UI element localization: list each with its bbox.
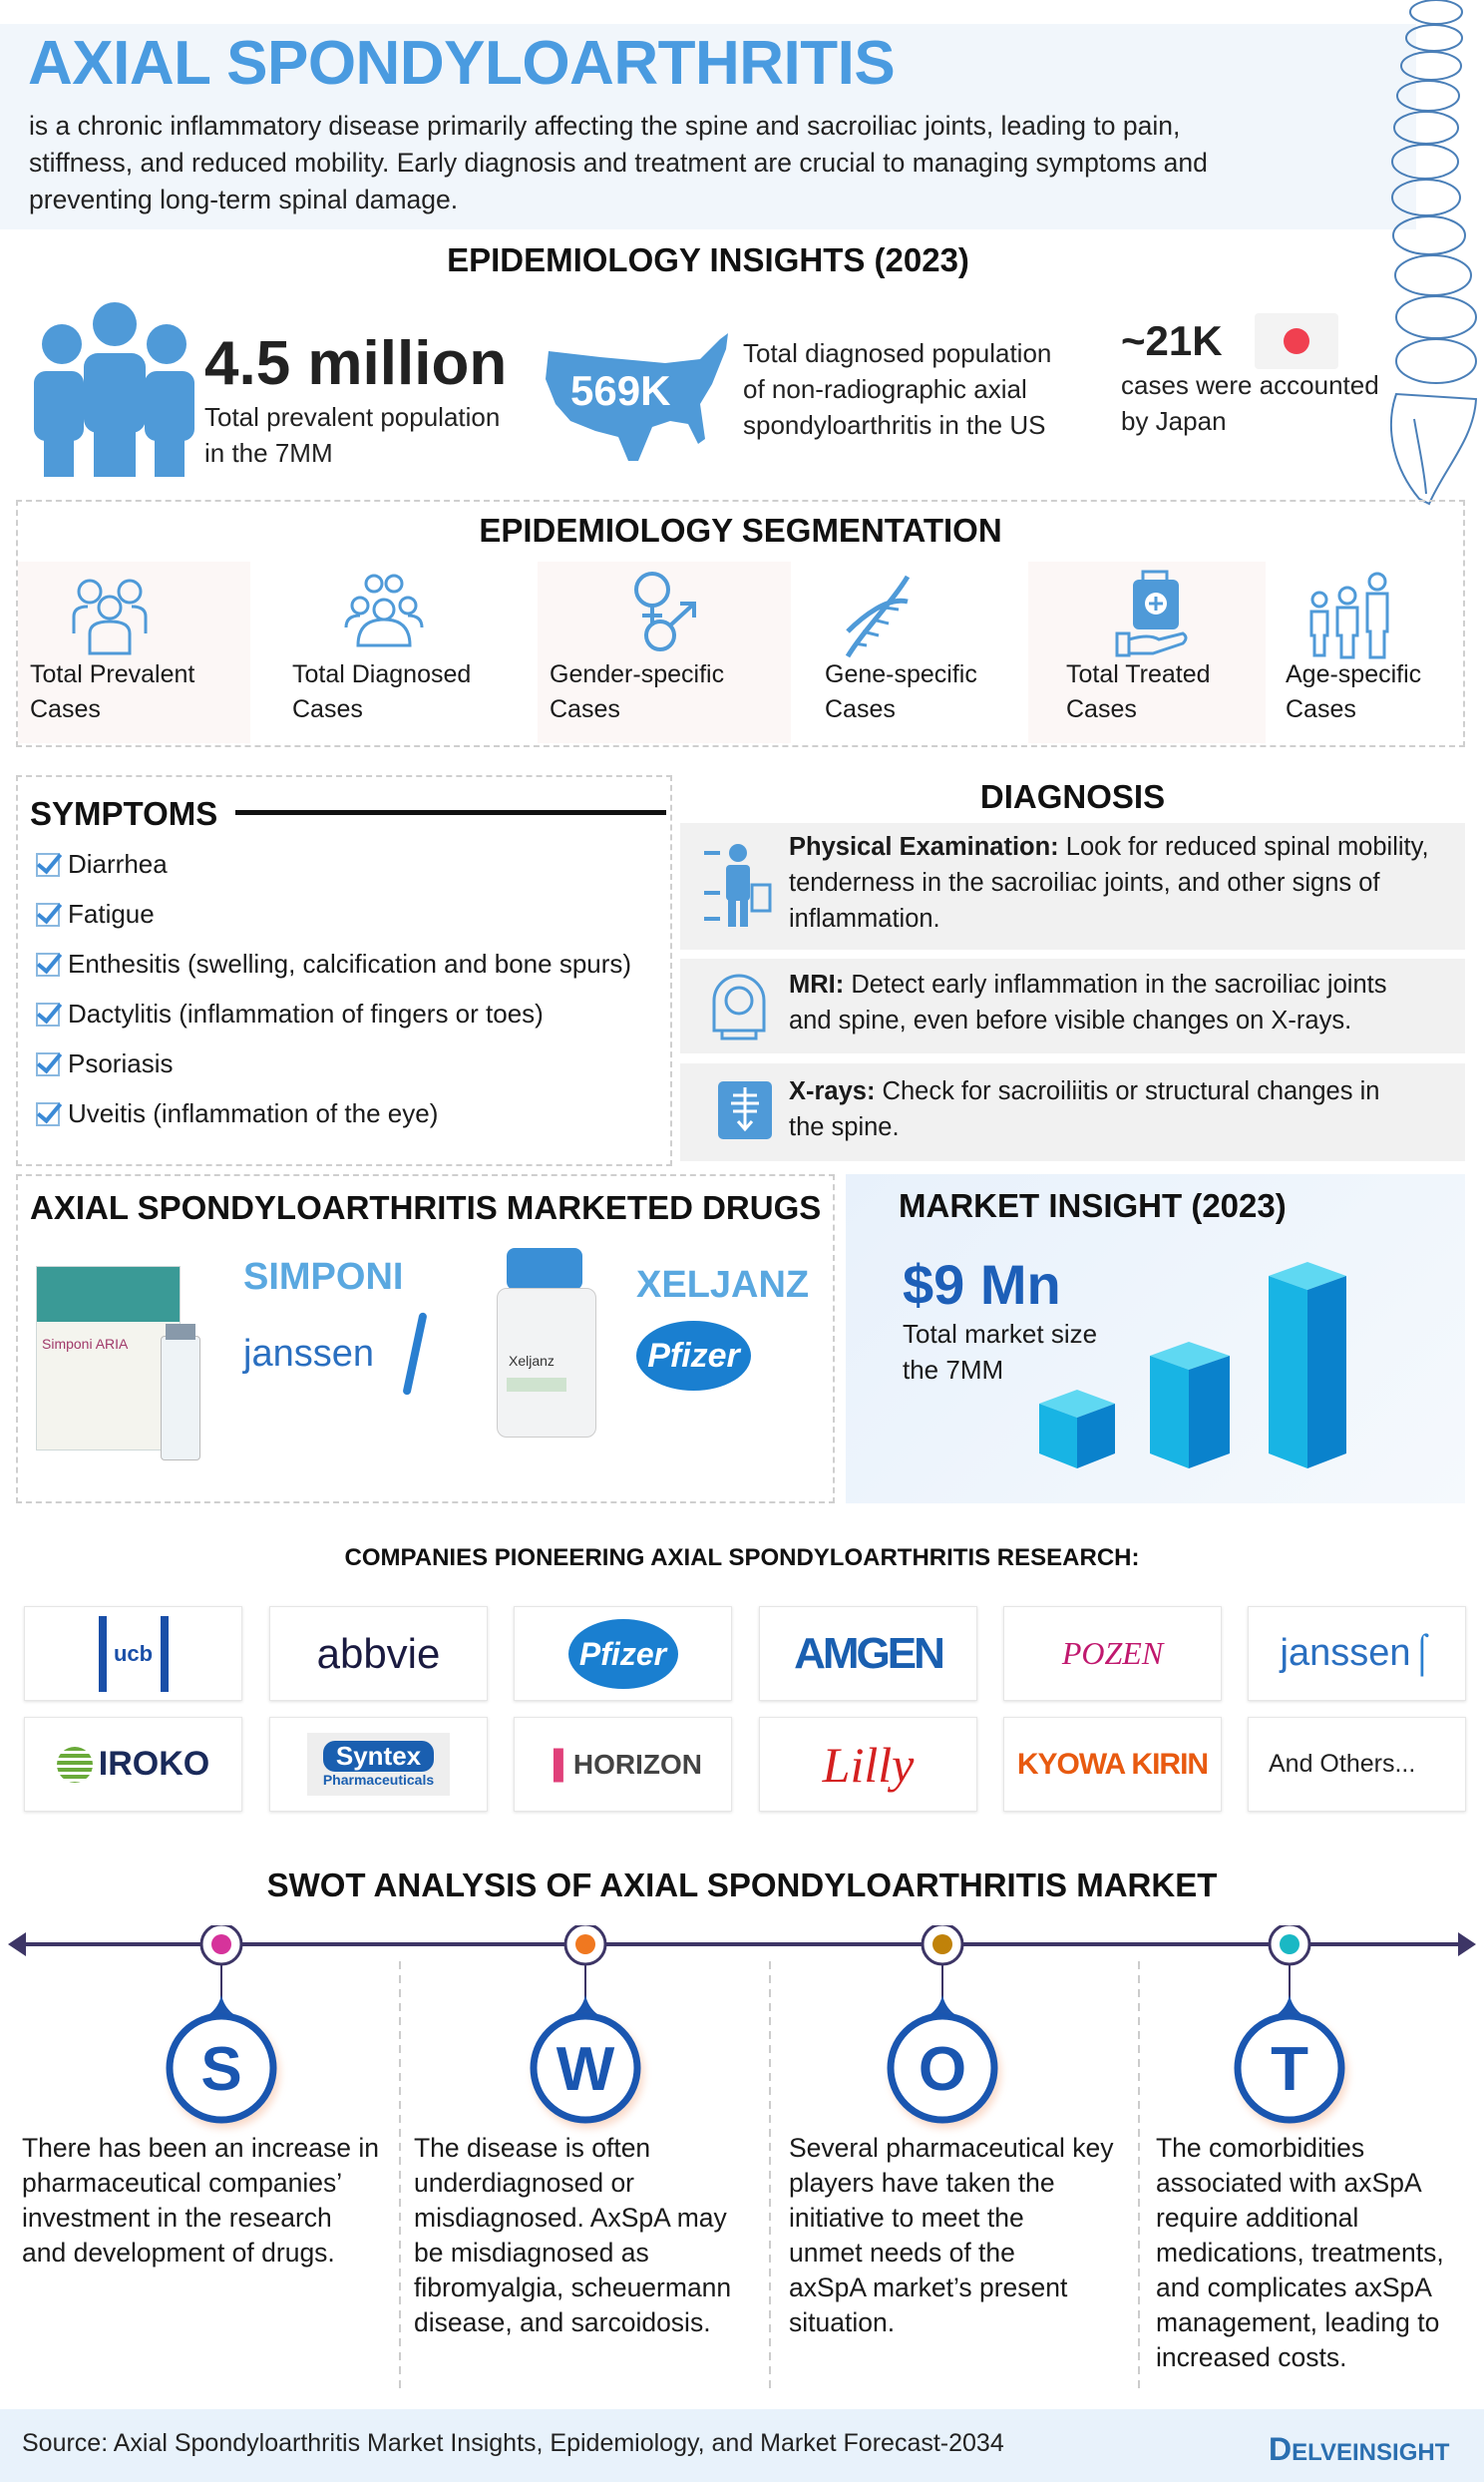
timeline with SWOT pins: O — [919, 2035, 966, 2104]
SWOT text: weaknesses: fibromyalgia, scheuermann — [414, 2273, 731, 2302]
stat: 4.5 million: in the 7MM — [204, 438, 333, 468]
heading: AXIAL SPONDYLOARTHRITIS MARKETED DRUGS — [30, 1189, 821, 1226]
SWOT text: threats: and complicates axSpA — [1156, 2273, 1432, 2302]
diagnosis: MRI — [680, 959, 1465, 1053]
title: AXIAL SPONDYLOARTHRITIS — [28, 29, 895, 98]
symptom list — [36, 849, 631, 1128]
stat: Japan: cases were accounted — [1121, 370, 1379, 400]
drug: simponi package: Simponi ARIA — [42, 1336, 128, 1352]
logo: DelveInsight: DELVEINSIGHT — [1269, 2431, 1449, 2467]
stat: Japan — [1121, 313, 1379, 436]
stat: 4.5 million: Total prevalent population — [204, 402, 500, 432]
SWOT text: weaknesses: The disease is often — [414, 2133, 650, 2163]
SWOT text: threats: management, leading to — [1156, 2307, 1439, 2337]
SWOT text: opportunities: axSpA market’s present — [789, 2273, 1067, 2302]
panel: market insight: the 7MM — [903, 1355, 1003, 1385]
heading: MARKET INSIGHT (2023) — [899, 1187, 1287, 1224]
SWOT text: threats — [1156, 2133, 1444, 2372]
logo grid: AMGEN — [794, 1628, 942, 1678]
stat: 4.5 million: 4.5 million — [204, 329, 507, 398]
symptom list: Diarrhea — [68, 849, 168, 879]
description: preventing long-term spinal damage. — [29, 185, 458, 214]
diagnosis: MRI: MRI: Detect early inflammation in the sacroiliac joints — [789, 971, 1386, 999]
segment: gender-specific: Gender-specific — [550, 660, 724, 688]
panel: market insight — [846, 1174, 1465, 1503]
drug: simponi package — [36, 1266, 200, 1460]
symptom list: Fatigue — [68, 899, 155, 929]
symptom list: Uveitis (inflammation of the eye) — [68, 1098, 438, 1128]
logo grid: ⌠ — [1411, 1632, 1433, 1674]
stat: 4.5 million — [204, 329, 507, 468]
diagnosis: X-rays: X-rays: Check for sacroiliitis or structural changes in — [789, 1077, 1379, 1105]
logo grid: Syntex — [336, 1741, 421, 1771]
stat text: US: of non-radiographic axial — [743, 374, 1027, 404]
drug name: xeljanz / pfizer: Pfizer — [647, 1337, 740, 1375]
logo grid: IROKO — [99, 1745, 209, 1783]
SWOT text: opportunities: Several pharmaceutical key — [789, 2133, 1114, 2163]
timeline with SWOT pins — [8, 1925, 1476, 2388]
SWOT text: threats: require additional — [1156, 2203, 1358, 2233]
segment: total diagnosed: Total Diagnosed — [292, 660, 471, 688]
stat text: US: spondyloarthritis in the US — [743, 410, 1045, 440]
logo grid: Lilly — [823, 1736, 914, 1792]
symptom list: Dactylitis (inflammation of fingers or toes) — [68, 999, 544, 1029]
panel: epidemiology segmentation — [16, 500, 1465, 747]
drug name: simponi / janssen: janssen — [243, 1333, 374, 1375]
header band — [0, 24, 1416, 229]
stat: Japan: ~21K — [1121, 317, 1223, 364]
segment: gender-specific — [538, 562, 791, 743]
drug: xeljanz bottle: Xeljanz — [509, 1353, 555, 1369]
source text: Source: Axial Spondyloarthritis Market Insights, Epidemiology, and Market Forecast-2034 — [22, 2429, 1004, 2457]
logo grid: ucb — [114, 1640, 153, 1666]
SWOT text: weaknesses: disease, and sarcoidosis. — [414, 2307, 711, 2337]
description — [29, 111, 1208, 214]
segment: total prevalent — [18, 562, 250, 743]
logo grid: ▐ — [544, 1748, 563, 1780]
spine illustration — [1390, 0, 1478, 505]
SWOT text: strengths: pharmaceutical companies’ — [22, 2168, 342, 2198]
segment: total treated: Total Treated — [1066, 660, 1211, 688]
segment: total prevalent: Cases — [30, 695, 101, 723]
heading: companies: COMPANIES PIONEERING AXIAL SPONDYLOARTHRITIS RESEARCH: — [345, 1544, 1139, 1571]
timeline with SWOT pins: W — [556, 2035, 615, 2104]
SWOT text: strengths — [22, 2133, 379, 2268]
SWOT text: weaknesses: misdiagnosed. AxSpA may — [414, 2203, 727, 2233]
logo grid: HORIZON — [573, 1748, 702, 1780]
panel: marketed drugs — [16, 1174, 835, 1503]
segment: gender-specific: Cases — [550, 695, 620, 723]
logo grid: KYOWA KIRIN — [1017, 1748, 1208, 1780]
SWOT text: strengths: investment in the research — [22, 2203, 332, 2233]
segment: age-specific: Age-specific — [1286, 660, 1421, 688]
segment: total treated — [1028, 562, 1266, 743]
segment: total treated: Cases — [1066, 695, 1137, 723]
SWOT text: threats: medications, treatments, — [1156, 2238, 1444, 2268]
panel: symptoms — [16, 775, 672, 1166]
diagnosis: X-rays — [680, 1063, 1465, 1161]
SWOT text: weaknesses — [414, 2133, 731, 2337]
heading: EPIDEMIOLOGY SEGMENTATION — [479, 512, 1002, 549]
SWOT text: threats: The comorbidities — [1156, 2133, 1364, 2163]
SWOT text: weaknesses: underdiagnosed or — [414, 2168, 634, 2198]
SWOT text: strengths: There has been an increase in — [22, 2133, 379, 2163]
segment: total prevalent: Total Prevalent — [30, 660, 194, 688]
logo grid — [23, 1606, 1467, 1814]
description: is a chronic inflammatory disease primarily affecting the spine and sacroiliac joints, leading to pain, — [29, 111, 1180, 141]
SWOT text: opportunities: players have taken the — [789, 2168, 1055, 2198]
diagnosis: MRI: and spine, even before visible changes on X-rays. — [789, 1007, 1351, 1034]
diagnosis: physical examination: Physical Examination: Look for reduced spinal mobility, — [789, 833, 1429, 861]
diagnosis: physical examination: inflammation. — [789, 905, 940, 933]
symptom list: Enthesitis (swelling, calcification and bone spurs) — [68, 949, 631, 979]
segment: gene-specific: Cases — [825, 695, 896, 723]
segment: total diagnosed: Cases — [292, 695, 363, 723]
segment: age-specific — [1286, 573, 1421, 723]
stat: $9 Mn: $9 Mn — [903, 1253, 1061, 1316]
drug name: xeljanz / pfizer — [636, 1264, 809, 1391]
SWOT text: opportunities — [789, 2133, 1114, 2337]
heading: diagnosis: DIAGNOSIS — [980, 778, 1165, 815]
logo grid: POZEN — [1062, 1635, 1163, 1671]
SWOT text: opportunities: initiative to meet the — [789, 2203, 1024, 2233]
diagnosis: physical examination: tenderness in the sacroiliac joints, and other signs of — [789, 869, 1380, 897]
footer — [0, 2409, 1484, 2482]
stat: Japan: by Japan — [1121, 406, 1227, 436]
symptom list: Psoriasis — [68, 1048, 173, 1078]
segment: gene-specific: Gene-specific — [825, 660, 977, 688]
drug name: simponi / janssen: SIMPONI — [243, 1256, 403, 1298]
segment: total diagnosed — [292, 575, 471, 723]
panel: market insight: Total market size — [903, 1319, 1097, 1349]
SWOT text: threats: associated with axSpA — [1156, 2168, 1422, 2198]
heading: epidemiology insights: EPIDEMIOLOGY INSIGHTS (2023) — [447, 241, 969, 278]
drug: xeljanz bottle — [497, 1248, 596, 1438]
segment: age-specific: Cases — [1286, 695, 1356, 723]
SWOT text: strengths: and development of drugs. — [22, 2238, 335, 2268]
logo grid: abbvie — [317, 1630, 440, 1676]
description: stiffness, and reduced mobility. Early diagnosis and treatment are crucial to managing symptoms and — [29, 148, 1208, 178]
icon: people — [34, 302, 194, 477]
drug name: simponi / janssen — [242, 1256, 427, 1395]
heading: symptoms: SYMPTOMS — [30, 795, 217, 832]
segment: gene-specific — [825, 575, 977, 723]
timeline with SWOT pins: T — [1271, 2035, 1308, 2104]
icon: US map with 569K: 569K — [570, 367, 670, 414]
logo grid: Pfizer — [579, 1636, 666, 1672]
logo grid: janssen — [1281, 1632, 1411, 1674]
logo grid: And Others... — [1269, 1750, 1415, 1778]
SWOT text: threats: increased costs. — [1156, 2342, 1346, 2372]
SWOT text: weaknesses: be misdiagnosed as — [414, 2238, 649, 2268]
timeline with SWOT pins: S — [200, 2035, 242, 2104]
SWOT text: opportunities: situation. — [789, 2307, 895, 2337]
drug name: xeljanz / pfizer: XELJANZ — [636, 1264, 809, 1306]
stat text: US: Total diagnosed population — [743, 338, 1051, 368]
stat text: US — [743, 338, 1051, 440]
logo grid: Pharmaceuticals — [323, 1772, 434, 1788]
icon: Japan flag — [1255, 313, 1338, 369]
icon: US map with 569K — [546, 333, 728, 461]
diagnosis: physical examination — [680, 823, 1465, 950]
bar chart: cubes — [1039, 1262, 1346, 1468]
diagnosis: X-rays: the spine. — [789, 1113, 900, 1141]
SWOT text: opportunities: unmet needs of the — [789, 2238, 1015, 2268]
heading: SWOT: SWOT ANALYSIS OF AXIAL SPONDYLOARTHRITIS MARKET — [267, 1866, 1217, 1903]
